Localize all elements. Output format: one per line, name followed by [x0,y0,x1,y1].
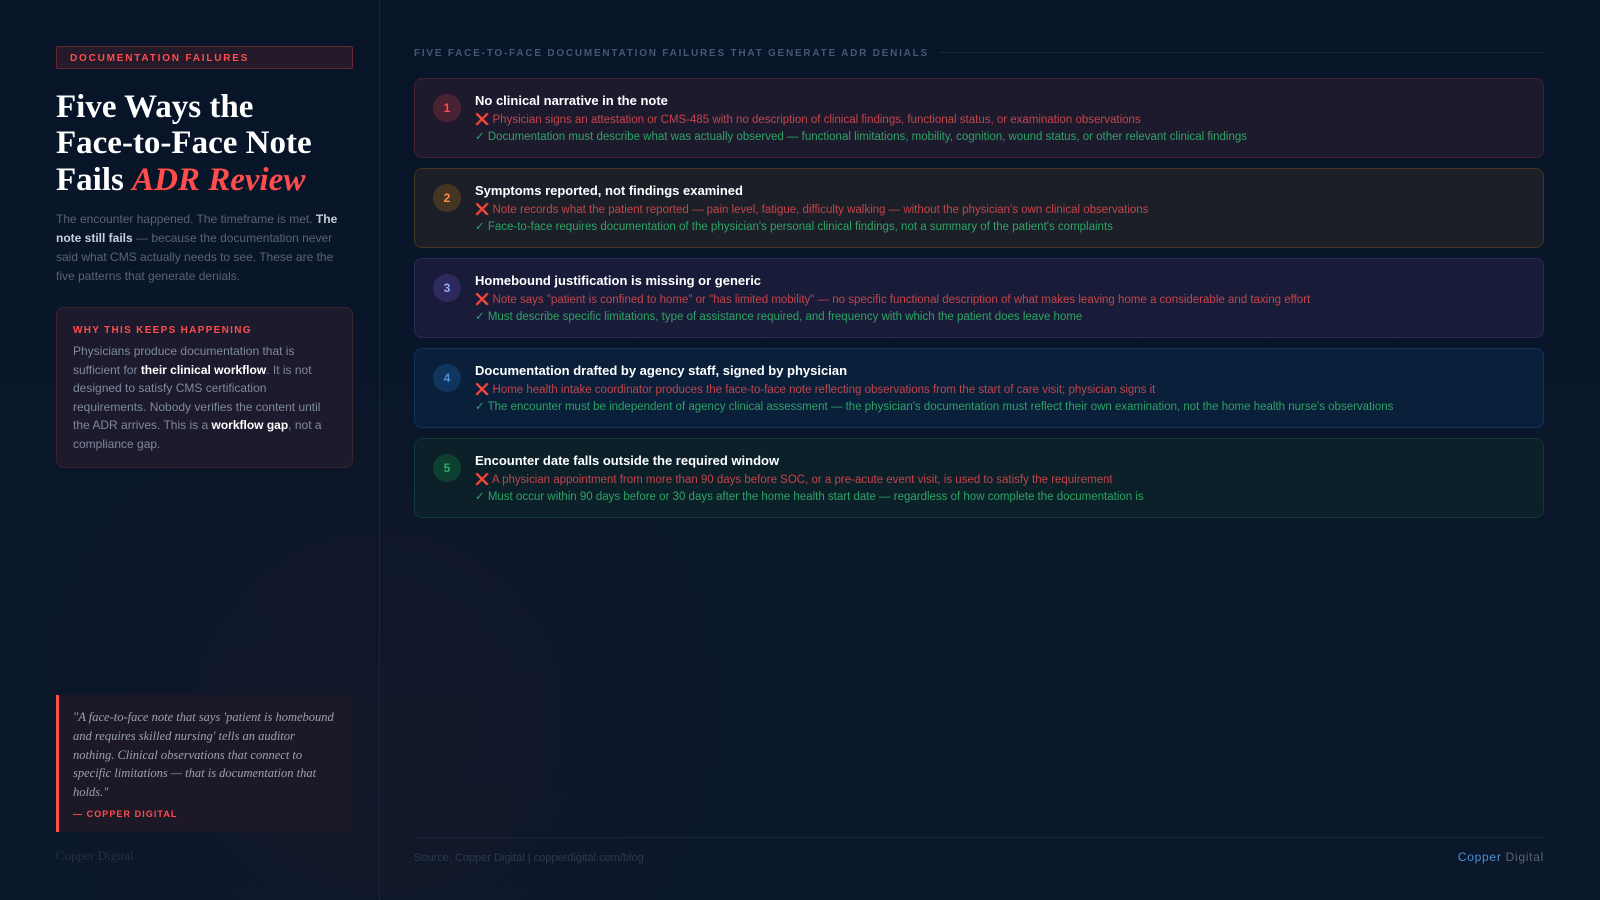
callout: quote [56,695,353,832]
title: Face-to-Face Note [56,125,312,161]
number 4 [433,364,461,392]
number 1: 1 [444,101,450,115]
badge: documentation failures: DOCUMENTATION FAILURES [70,53,249,64]
source: Source: Copper Digital | copperdigital.com/blog [414,852,644,864]
problem 1: ❌ Physician signs an attestation or CMS-485 with no description of clinical findings, functional status, or examination observations [475,114,1141,126]
title [56,89,312,198]
brand: sidebar: Copper Digital [56,848,134,863]
heading: why: WHY THIS KEEPS HAPPENING [73,325,252,336]
panel: failure 5 [414,438,1544,518]
badge: documentation failures [56,46,353,69]
panel: why this keeps happening [56,307,353,468]
quote text: "A face-to-face note that says 'patient is homebound and requires skilled nursing' tells an auditor nothing. Clinical observations that connect to specific limitations — that is documentation that holds." [73,710,334,799]
quote attribution: — COPPER DIGITAL [73,809,177,819]
problem 3: ❌ Note says "patient is confined to home" or "has limited mobility" — no specific functional description of what makes leaving home a considerable and taxing effort [475,294,1310,306]
number 2: 2 [444,191,450,205]
number 3 [433,274,461,302]
heading: section: FIVE FACE-TO-FACE DOCUMENTATION FAILURES THAT GENERATE ADR DENIALS [414,48,929,59]
number 4: 4 [444,371,450,385]
title: Fails ADR Review [56,162,305,198]
title 4: Documentation drafted by agency staff, signed by physician [475,363,847,378]
number 5 [433,454,461,482]
fix 4: ✓ The encounter must be independent of agency clinical assessment — the physician's documentation must reflect their own examination, not the home health nurse's observations [475,401,1393,413]
title 2: Symptoms reported, not findings examined [475,183,743,198]
title 5: Encounter date falls outside the required window [475,453,779,468]
panel: failure 4 [414,348,1544,428]
panel: failure 1 [414,78,1544,158]
panel: failure 3 [414,258,1544,338]
number 1 [433,94,461,122]
title 1: No clinical narrative in the note [475,93,668,108]
title 3: Homebound justification is missing or generic [475,273,761,288]
fix 2: ✓ Face-to-face requires documentation of the physician's personal clinical findings, not a summary of the patient's complaints [475,221,1113,233]
title: Five Ways the [56,89,253,125]
brand: footer: Copper Digital [1458,850,1544,864]
fix 1: ✓ Documentation must describe what was actually observed — functional limitations, mobility, cognition, wound status, or other relevant clinical findings [475,131,1247,143]
problem 5: ❌ A physician appointment from more than 90 days before SOC, or a pre-acute event visit, is used to satisfy the requirement [475,474,1113,486]
number 3: 3 [444,281,450,295]
number 5: 5 [444,461,450,475]
problem 2: ❌ Note records what the patient reported — pain level, fatigue, difficulty walking — without the physician's own clinical observations [475,204,1148,216]
panel: failure 2 [414,168,1544,248]
text block: why: Physicians produce documentation that is sufficient for their clinical workflow. It is not designed to satisfy CMS certification requirements. Nobody verifies the content until the ADR arrives. This is a workflow gap, not a compliance gap. [73,344,322,451]
number 2 [433,184,461,212]
problem 4: ❌ Home health intake coordinator produces the face-to-face note reflecting observations from the start of care visit; physician signs it [475,384,1155,396]
text block: intro: The encounter happened. The timeframe is met. The note still fails — because the documentation never said what CMS actually needs to see. These are the five patterns that generate denials. [56,212,337,283]
fix 3: ✓ Must describe specific limitations, type of assistance required, and frequency with which the patient does leave home [475,311,1082,323]
fix 5: ✓ Must occur within 90 days before or 30 days after the home health start date — regardless of how complete the documentation is [475,491,1144,503]
